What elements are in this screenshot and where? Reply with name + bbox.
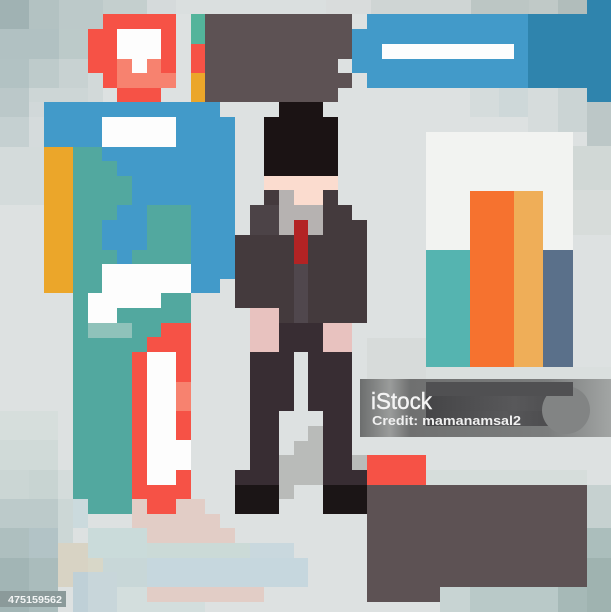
orange side bar [44,147,73,293]
businessman [235,102,367,514]
right hand [323,323,352,352]
orange bar [470,191,514,367]
watermark logo: iStock [371,388,432,414]
trousers [235,323,367,485]
face [264,176,338,205]
blue banner [352,0,611,102]
hat [264,102,338,176]
watermark credit: Credit: mamanamsal2 [372,413,521,428]
image id tag [0,591,66,607]
dark bottom panel [367,485,587,602]
light orange bar [514,191,543,367]
white pocket [88,264,191,323]
image id tag: 475159562 [8,595,62,606]
jacket [235,190,367,323]
jacket centre seam [294,264,308,323]
white label [102,117,176,147]
left hand [250,308,279,352]
bar chart card [426,132,573,367]
dark title panel [205,14,352,102]
red pixel person head [88,14,176,102]
tie [294,220,308,264]
teal body [73,147,191,514]
collar [279,190,323,235]
red tab [367,455,426,485]
jacket shoulder shading [250,205,279,235]
red phone [132,323,191,514]
pale teal strip [88,323,132,338]
stacked colour stripes [191,14,205,102]
watermark band [360,379,611,437]
blue body [44,102,235,293]
left shoe [235,485,279,514]
banner white bar [382,44,514,59]
left blue and teal figure [44,102,235,514]
card background [426,132,573,250]
grey floor shadow [279,426,367,499]
right shoe [323,485,367,514]
teal bar [426,250,470,367]
pale pink shadow [132,499,264,602]
slate bar [543,250,573,367]
